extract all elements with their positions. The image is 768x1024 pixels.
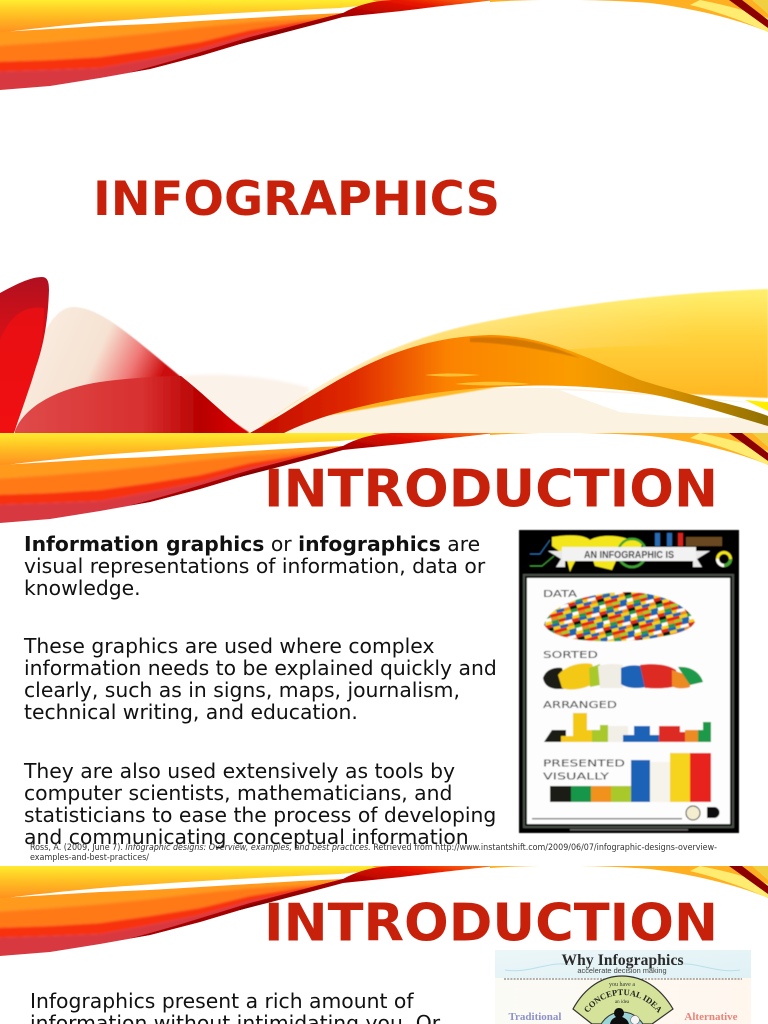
text block: used by scientists: and communicating conceptual information (24, 825, 469, 849)
sorted lego piles (543, 663, 703, 690)
text block: definition: visual representations of information, data or (24, 554, 486, 578)
slide 2: introduction with lego infographic (0, 433, 768, 866)
decorative bottom ribbon artwork, slide 1 (0, 277, 768, 433)
ribbon title (548, 551, 710, 567)
picture: why infographics: you have a (609, 982, 635, 988)
label: data: DATA (543, 589, 577, 600)
text block: where graphics are used: clearly, such as in signs, maps, journalism, (24, 678, 460, 702)
picture: why infographics: an idea (615, 1000, 630, 1005)
label: presented visually: VISUALLY (543, 772, 610, 782)
footnote citation, second line: examples-and-best-practices/ (30, 852, 149, 862)
picture: an infographic is (519, 530, 739, 833)
label: traditional: Traditional (509, 1011, 561, 1023)
footnote citation: Ross, A. (2009, June 7). Infographic designs: Overview, examples, and best practices. Retrieved from http://www.instantshift.com/2009/06/07/infographic-designs-overview- (30, 842, 717, 852)
label: presented visually (543, 758, 625, 782)
slide 1: title slide (0, 0, 768, 433)
slide 3: introduction continued (0, 866, 768, 1024)
label: arranged: ARRANGED (543, 700, 617, 711)
picture: why infographics: CONCEPTUAL IDEA (584, 989, 661, 1014)
picture: why infographics (495, 950, 751, 1024)
text block: where graphics are used: These graphics are used where complex (24, 634, 434, 658)
text block: definition: Information graphics or infographics are (24, 532, 480, 556)
decorative top ribbon banner, slide 1 (0, 0, 768, 100)
picture: an infographic is: AN INFOGRAPHIC IS (584, 549, 674, 561)
fan: conceptual idea (573, 976, 673, 1024)
lego bar chart (550, 753, 711, 802)
text block: used by scientists: statisticians to ease the process of developing (24, 803, 496, 827)
text block: definition: knowledge. (24, 576, 141, 600)
lego pile (544, 592, 695, 641)
arranged lego stacks (544, 713, 711, 742)
picture heading: Why Infographics (562, 952, 684, 969)
world map (552, 535, 642, 572)
credit badges (532, 806, 720, 830)
person silhouette (610, 1008, 629, 1024)
white inner board (524, 575, 733, 827)
text block: rich information: Infographics present a rich amount of (30, 989, 414, 1013)
label: sorted: SORTED (543, 650, 598, 661)
label: presented visually: PRESENTED (543, 758, 625, 770)
decorative top ribbon banner, slide 2 (0, 433, 768, 533)
donut chart (718, 552, 730, 566)
picture subheading: accelerate decision making (577, 966, 667, 975)
text block: where graphics are used: technical writing, and education. (24, 700, 358, 724)
label: alternative: Alternative (684, 1011, 738, 1023)
title: Infographics: INFOGRAPHICS (93, 172, 500, 227)
heading: Introduction: INTRODUCTION (264, 894, 718, 954)
text block: used by scientists: computer scientists, mathematicians, and (24, 781, 452, 805)
decorative top ribbon banner, slide 3 (0, 866, 768, 966)
text block: used by scientists: They are also used extensively as tools by (24, 759, 455, 783)
heading: Introduction: INTRODUCTION (264, 460, 718, 520)
text block: where graphics are used: information needs to be explained quickly and (24, 656, 497, 680)
